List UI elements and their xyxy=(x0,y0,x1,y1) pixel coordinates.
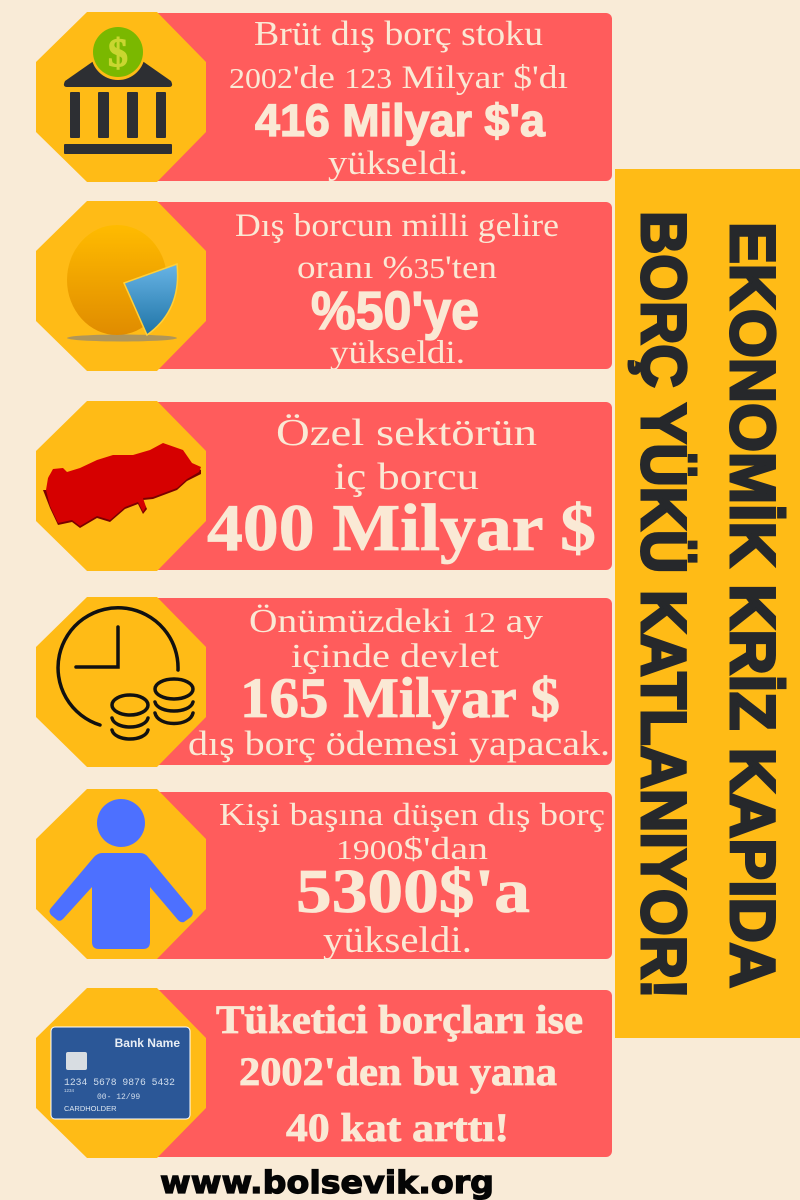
octagon badge 1 xyxy=(36,12,206,182)
icon: credit card: 1234 5678 9876 5432 xyxy=(64,1077,175,1089)
icon: credit card: Bank Name xyxy=(115,1036,180,1050)
text block 1: Brüt dış borç stoku xyxy=(254,14,543,53)
icon: bank with dollar coin: $ xyxy=(108,30,128,75)
text block 1 xyxy=(229,14,568,182)
text block 2: Dış borcun milli gelire xyxy=(235,208,559,244)
panel: upcoming state debt payments xyxy=(36,597,612,767)
text block 6: Tüketici borçları ise xyxy=(216,997,583,1042)
text block 3: iç borcu xyxy=(334,456,479,498)
text block 4: Önümüzdeki 12 ay xyxy=(249,603,543,640)
text block 2: oranı % 35'ten xyxy=(297,250,497,286)
icon: credit card xyxy=(51,1027,190,1119)
text block 4: 165 Milyar $ xyxy=(240,667,560,730)
octagon badge 6 xyxy=(36,988,206,1158)
icon: credit card: CARDHOLDER xyxy=(64,1104,117,1113)
panel: consumer debt xyxy=(36,988,612,1158)
icon: map of Turkey xyxy=(43,443,201,528)
text block 4: içinde devlet xyxy=(291,638,500,675)
text block 6: 40 kat arttı! xyxy=(286,1105,509,1150)
panel: debt to national income xyxy=(36,201,612,371)
octagon badge 5 xyxy=(36,789,206,959)
text block 4 xyxy=(188,603,610,763)
icon: bank with dollar coin xyxy=(64,26,172,154)
octagon badge 3 xyxy=(36,401,206,571)
text block 1: yükseldi. xyxy=(328,145,468,182)
text block 2: %50'ye xyxy=(311,281,479,341)
text block 1: 416 Milyar $'a xyxy=(255,95,546,146)
text block 2: yükseldi. xyxy=(330,335,465,371)
text block 3: 400 Milyar $ xyxy=(207,491,596,565)
title line 2: BORÇ YÜKÜ KATLANIYOR! xyxy=(628,211,698,999)
icon: pie chart xyxy=(67,225,178,342)
text block 3 xyxy=(207,412,596,565)
panel: private sector domestic debt xyxy=(36,401,612,571)
text block 5: 1900 $'dan xyxy=(336,830,488,866)
icon: person xyxy=(50,799,193,949)
panel: gross external debt xyxy=(36,12,612,182)
text block 6 xyxy=(216,997,583,1150)
panel: external debt per capita xyxy=(36,789,612,961)
text block 5: 5300$'a xyxy=(296,858,530,926)
text block 5 xyxy=(219,796,605,961)
title line 1: EKONOMİK KRİZ KAPIDA xyxy=(717,222,787,988)
octagon badge 2 xyxy=(36,201,206,371)
footer website: www.bolsevik.org xyxy=(160,1165,494,1200)
octagon badge 4 xyxy=(36,597,206,767)
icon: credit card: 1234 xyxy=(64,1088,75,1093)
panel: vertical title xyxy=(615,169,800,1038)
icon: clock with coins xyxy=(58,608,193,739)
text block 3: Özel sektörün xyxy=(276,412,537,454)
text block 5: Kişi başına düşen dış borç xyxy=(219,796,605,832)
text block 5: yükseldi. xyxy=(323,920,472,961)
text block 6: 2002'den bu yana xyxy=(239,1049,557,1094)
text block 2 xyxy=(235,208,559,371)
text block 4: dış borç ödemesi yapacak. xyxy=(188,724,610,763)
icon: credit card: 00- 12/99 xyxy=(97,1093,140,1102)
text block 1: 2002'de 123 Milyar $'dı xyxy=(229,60,568,96)
